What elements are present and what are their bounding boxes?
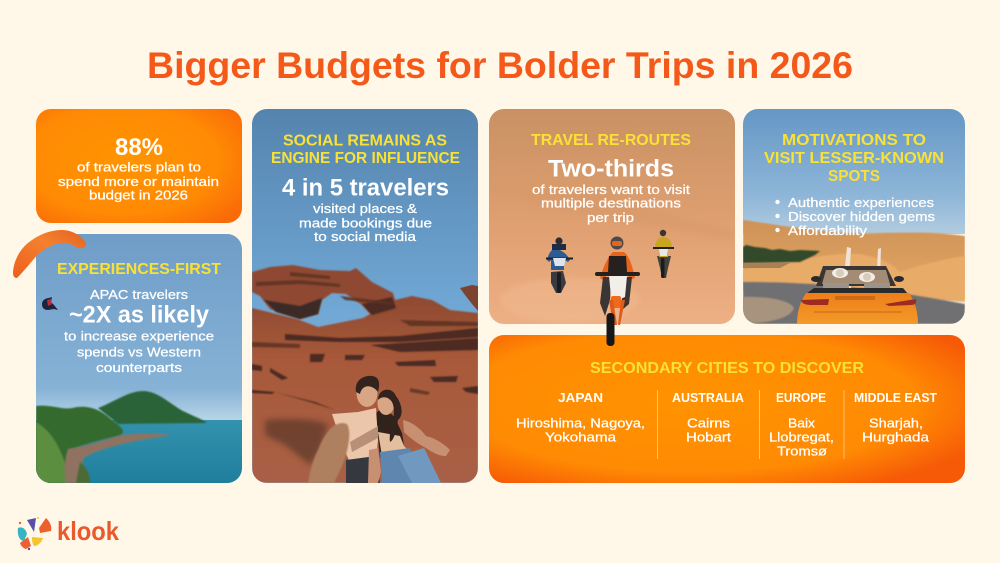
panel: secondary cities [489,335,965,483]
text: multiple destinations: per trip [587,210,634,225]
icon: paraglider pilot [42,297,58,310]
title: Bigger Budgets for Bolder Trips in 2026 [147,45,853,86]
stat: two-thirds: Two-thirds [548,156,674,182]
text: social media description: visited places & [313,201,417,216]
text: budget description: spend more or maintain [58,174,219,189]
photo: red rock arch and couple [252,109,478,483]
list: motivations: Discover hidden gems [788,209,936,224]
column: Europe [769,390,834,458]
column: Australia [672,390,745,444]
text: budget description: budget in 2026 [89,188,188,202]
column: Middle East: Hurghada [862,430,930,444]
heading: social remains as engine for influence: ENGINE FOR INFLUENCE [271,150,460,167]
column: Australia: AUSTRALIA [672,390,745,405]
text: social media description: made bookings due [299,216,432,230]
heading: motivations to visit lesser-known spots: MOTIVATIONS TO [782,132,926,149]
list: motivations: Authentic experiences [788,195,935,210]
column: Middle East [854,390,937,444]
list: motivations: Affordability [788,223,868,238]
column: Japan: Hiroshima, Nagoya, [516,416,645,430]
text: multiple destinations: of travelers want to visit [532,182,690,197]
column: Europe: EUROPE [776,390,826,405]
column: Japan: Yokohama [545,430,617,444]
figure: couple [308,376,450,483]
panel: motivations for lesser-known spots [743,109,965,324]
column: Australia: Hobart [686,430,731,444]
heading: motivations to visit lesser-known spots [764,132,944,185]
heading: secondary cities to discover: SECONDARY CITIES TO DISCOVER [590,360,864,377]
stat: 88%: 88% [115,134,163,161]
column: Europe: Llobregat, [769,430,834,444]
text: multiple destinations: multiple destinations [541,196,682,210]
photo: desert dunes [489,109,735,324]
figure: rider in yellow [653,230,674,278]
panel: social influence [252,109,478,483]
icon: klook petals [18,517,51,550]
photo: coastal island [36,234,242,483]
figure: convertible car and passengers [797,247,918,324]
figure: lead motorbike rider overlapping panels [595,236,640,346]
column: Japan [516,390,645,444]
column: Europe: Tromsø [777,444,827,458]
icon: paraglider wing [13,230,86,278]
panel: 88% budget stat [36,109,242,223]
text: experience spends: spends vs Western [77,344,201,360]
stat: 4 in 5 travelers: 4 in 5 travelers [282,174,449,202]
text: experience spends: counterparts [96,360,183,375]
column: Middle East: Sharjah, [869,416,923,430]
text: multiple destinations [532,182,690,225]
text: experience spends: to increase experience [64,328,214,344]
list: motivations [775,195,936,238]
column: Japan: JAPAN [558,390,603,405]
figure: rider in blue [546,237,573,293]
heading: motivations to visit lesser-known spots: SPOTS [828,168,880,185]
heading: travel re-routes: TRAVEL RE-ROUTES [531,132,691,149]
text: experience spends [64,328,214,375]
heading: social remains as engine for influence: SOCIAL REMAINS AS [283,132,447,150]
photo: convertible in desert [743,109,965,324]
text: social media description [299,201,432,244]
stat: 2X as likely: ~2X as likely [69,302,210,328]
column: Europe: Baix [788,416,816,430]
wordmark: klook: klook [57,516,119,546]
column: Australia: Cairns [687,416,731,430]
text: APAC travelers: APAC travelers [90,287,189,302]
panel: experiences-first [36,234,242,483]
heading: motivations to visit lesser-known spots: VISIT LESSER-KNOWN [764,150,944,167]
text: social media description: to social media [314,229,417,244]
logo: klook [18,516,119,550]
text: budget description: of travelers plan to [77,160,201,174]
heading: experiences-first: EXPERIENCES-FIRST [57,261,222,278]
column: Middle East: MIDDLE EAST [854,390,937,405]
text: budget description [58,160,219,202]
panel: travel re-routes [489,109,735,324]
heading: social remains as engine for influence [271,132,460,167]
